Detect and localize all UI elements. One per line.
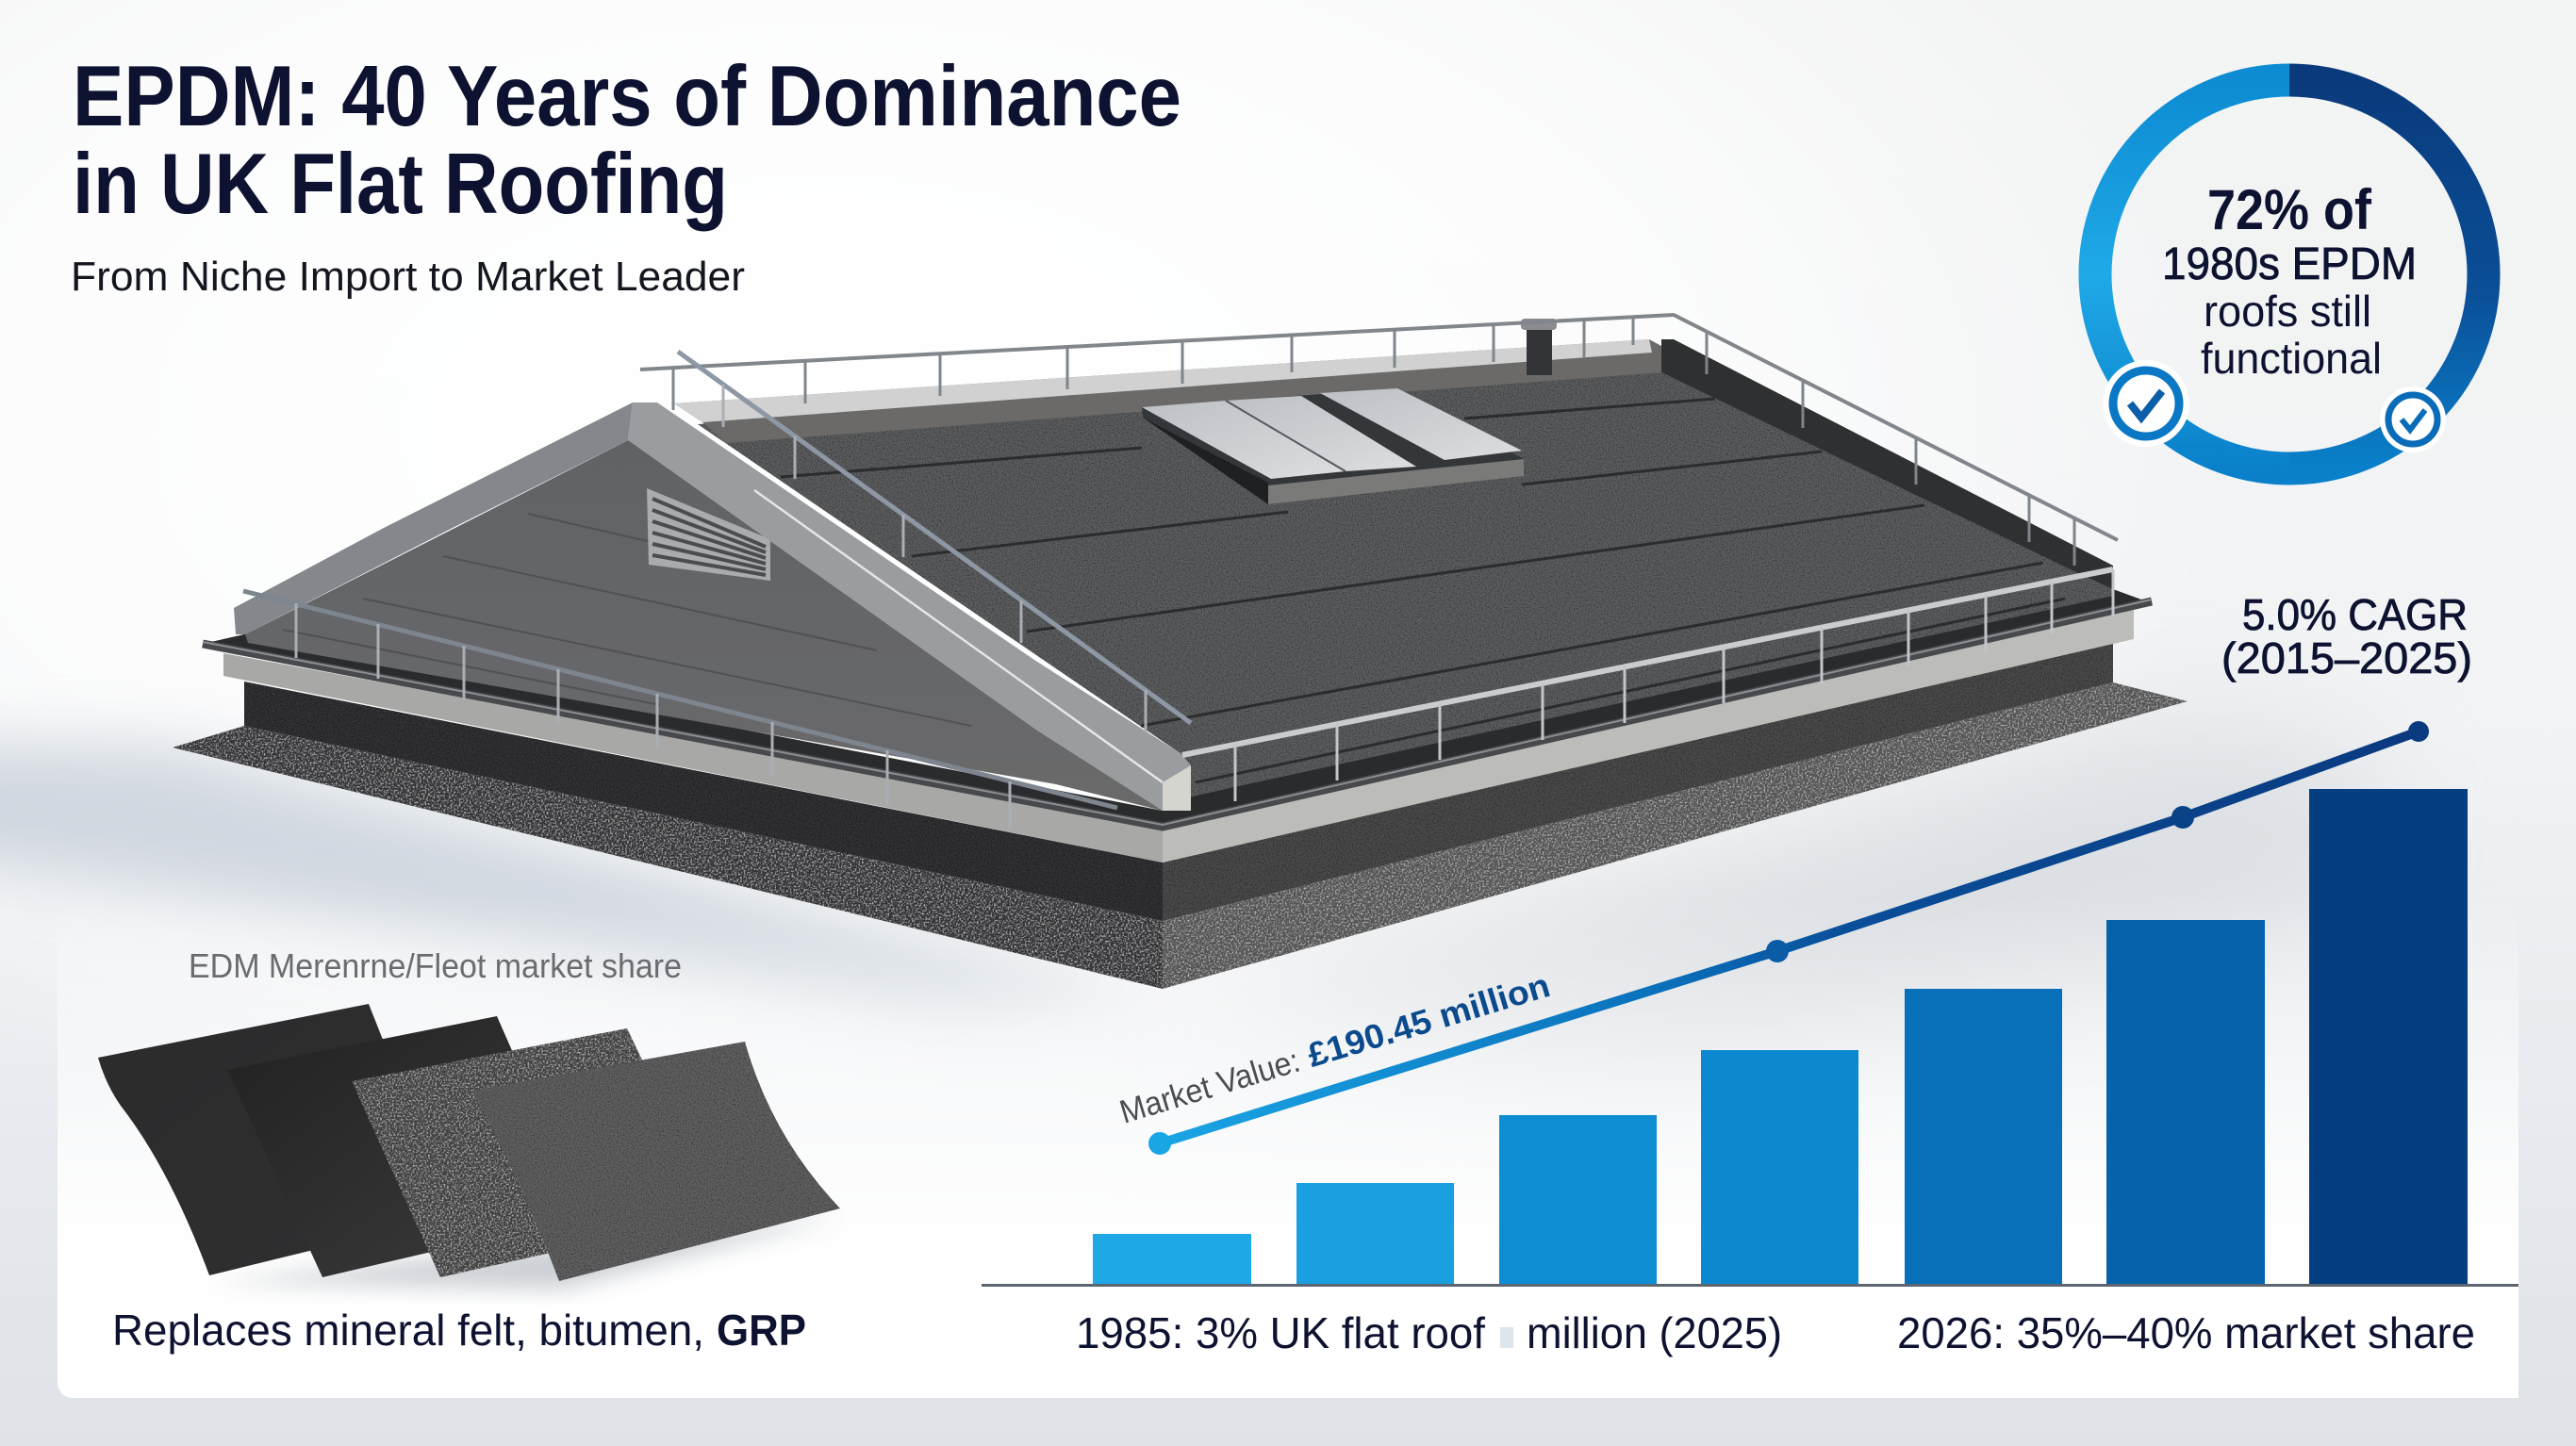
icon: check badge left xyxy=(2103,360,2189,447)
main roof deck xyxy=(698,372,2113,797)
sample: rubber sheet 2 xyxy=(227,1016,585,1277)
white content panel xyxy=(58,896,2518,1398)
title xyxy=(73,49,1181,232)
sample: rubber sheet 1 xyxy=(98,1004,453,1275)
market value label: Market Value: xyxy=(1115,1043,1304,1131)
side parapet xyxy=(1661,339,2113,589)
gutter tray xyxy=(203,589,2152,827)
bottom axis captions: million (2025) xyxy=(1527,1308,1782,1357)
skylights xyxy=(1142,388,1524,504)
gable cladding seams xyxy=(283,514,971,726)
icon: check badge right xyxy=(2380,386,2446,452)
gauge text: functional xyxy=(2201,334,2382,383)
donut gauge: 72% still functional xyxy=(2095,80,2484,468)
ring xyxy=(2095,80,2484,468)
title: EPDM: 40 Years of Dominance xyxy=(73,49,1181,144)
roof illustration xyxy=(173,315,2188,989)
CAGR label: 5.0% CAGR xyxy=(2242,590,2468,639)
bottom axis captions: 2026: 35%–40% market share xyxy=(1897,1308,2475,1357)
gable vent louvre xyxy=(647,488,770,581)
gauge text: roofs still xyxy=(2204,287,2371,336)
gable barge boards xyxy=(234,403,1191,811)
bar chart: market share growth xyxy=(982,789,2518,1287)
vent pipe xyxy=(1521,319,1557,375)
gauge text: 1980s EPDM xyxy=(2162,239,2417,289)
gravel skirt xyxy=(173,682,2188,989)
materials caption: GRP xyxy=(717,1306,806,1355)
rear parapet xyxy=(674,339,1661,443)
trend line xyxy=(1148,721,2429,1155)
building wall xyxy=(244,641,2113,921)
title: in UK Flat Roofing xyxy=(73,137,728,232)
safety railings xyxy=(243,315,2118,829)
fascia band xyxy=(223,608,2134,863)
bottom axis captions: 1985: 3% UK flat roof xyxy=(1076,1308,1485,1357)
gutter xyxy=(203,600,2152,827)
material samples xyxy=(98,1004,840,1290)
material samples caption: EDM Merenrne/Fleot market share xyxy=(189,946,682,985)
market value label xyxy=(1115,965,1554,1131)
market value label: £190.45 million xyxy=(1303,965,1554,1075)
bottom axis captions xyxy=(1076,1308,2475,1357)
materials caption: Replaces mineral felt, bitumen, xyxy=(112,1306,704,1355)
gauge text: 72% of xyxy=(2207,178,2372,241)
deck seams xyxy=(781,399,2065,782)
subtitle: From Niche Import to Market Leader xyxy=(71,254,745,300)
CAGR label: (2015–2025) xyxy=(2221,633,2472,682)
gauge text xyxy=(2162,178,2417,383)
CAGR label xyxy=(2221,590,2472,682)
sample: grey mineral sheet xyxy=(471,1042,840,1281)
gable face xyxy=(245,440,1163,811)
sample: speckled felt sheet xyxy=(352,1028,717,1277)
